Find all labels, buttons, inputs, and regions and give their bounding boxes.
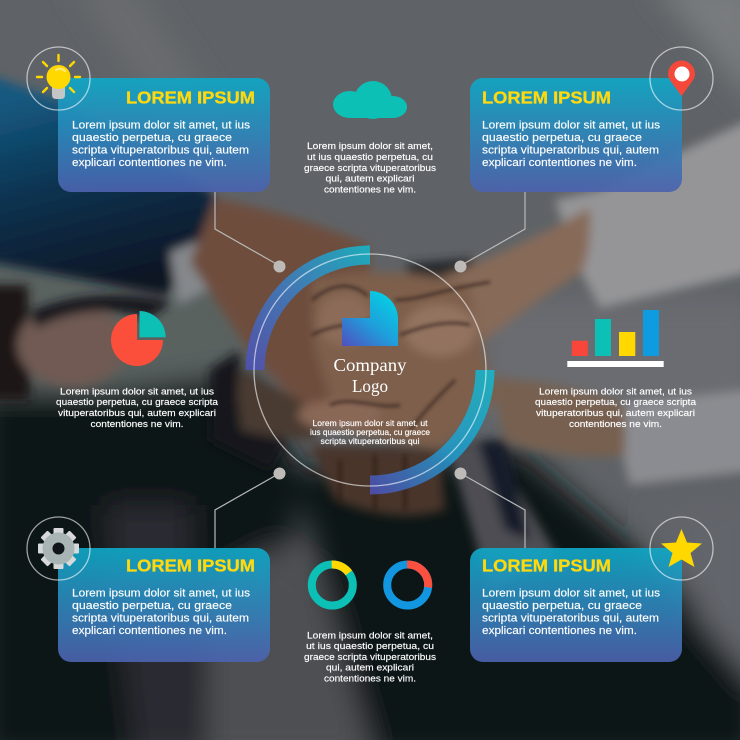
- cloud text: graece scripta vituperatoribus: [304, 162, 436, 173]
- panel: bottom right: [470, 548, 682, 662]
- company logo mark: [342, 291, 398, 346]
- panel text: explicari contentiones ne vim.: [72, 625, 227, 637]
- panel text: [482, 588, 660, 637]
- pie chart text: [56, 386, 219, 429]
- panel text: quaestio perpetua, cu graece: [72, 132, 232, 144]
- pie chart text: Lorem ipsum dolor sit amet, ut ius: [60, 386, 214, 396]
- central text: Lorem ipsum dolor sit amet, ut: [312, 418, 428, 428]
- icon: star: [650, 517, 713, 580]
- heading: LOREM IPSUM: [482, 556, 611, 576]
- company name: Logo: [352, 376, 388, 396]
- panel text: scripta vituperatoribus qui, autem: [482, 144, 659, 156]
- central text: ius quaestio perpetua, cu graece: [310, 427, 430, 437]
- panel text: Lorem ipsum dolor sit amet, ut ius: [72, 588, 250, 600]
- donut charts text: graece scripta vituperatoribus: [304, 651, 436, 662]
- central text: [310, 418, 430, 446]
- cloud text: [304, 140, 436, 194]
- pie chart text: contentiones ne vim.: [90, 418, 184, 429]
- donut charts text: contentiones ne vim.: [324, 672, 416, 684]
- icon: pie chart: [111, 311, 166, 366]
- bar chart: [567, 310, 664, 367]
- donut charts text: qui, autem explicari: [326, 662, 414, 672]
- donut: teal and yellow: [312, 564, 353, 606]
- panel text: explicari contentiones ne vim.: [72, 157, 227, 169]
- pie chart text: vituperatoribus qui, autem explicari: [58, 407, 216, 418]
- heading: LOREM IPSUM: [126, 88, 255, 108]
- cloud text: Lorem ipsum dolor sit amet,: [307, 140, 433, 151]
- panel text: [72, 120, 250, 169]
- panel text: quaestio perpetua, cu graece: [482, 132, 642, 144]
- panel: bottom left: [58, 548, 270, 662]
- pie chart text: quaestio perpetua, cu graece scripta: [56, 396, 219, 407]
- panel text: quaestio perpetua, cu graece: [72, 600, 232, 612]
- company name: [334, 355, 406, 396]
- panel text: [482, 120, 660, 169]
- donut charts: [312, 564, 428, 606]
- panel text: explicari contentiones ne vim.: [482, 625, 637, 637]
- donut charts text: [304, 630, 436, 684]
- panel text: scripta vituperatoribus qui, autem: [72, 144, 249, 156]
- panel text: Lorem ipsum dolor sit amet, ut ius: [72, 120, 250, 132]
- donut charts text: ut ius quaestio perpetua, cu: [306, 640, 434, 651]
- icon: light bulb: [27, 47, 90, 110]
- panel: top right: [470, 78, 682, 192]
- icon: map pin: [650, 47, 713, 110]
- panel text: explicari contentiones ne vim.: [482, 157, 637, 169]
- central text: scripta vituperatoribus qui: [320, 436, 420, 446]
- central ring with arcs: [246, 246, 494, 494]
- cloud text: qui, autem explicari: [326, 172, 414, 184]
- donut charts text: Lorem ipsum dolor sit amet,: [307, 630, 433, 640]
- company name: Company: [334, 355, 406, 375]
- panel text: Lorem ipsum dolor sit amet, ut ius: [482, 588, 660, 600]
- icon: cloud: [333, 81, 407, 119]
- bar chart text: [535, 386, 697, 429]
- heading: LOREM IPSUM: [126, 556, 255, 576]
- bar chart text: vituperatoribus qui, autem explicari: [536, 407, 695, 418]
- icon: gear: [27, 517, 90, 580]
- bar chart text: Lorem ipsum dolor sit amet, ut ius: [539, 386, 692, 396]
- panel text: quaestio perpetua, cu graece: [482, 600, 642, 612]
- panel: top left: [58, 78, 270, 192]
- panel text: scripta vituperatoribus qui, autem: [72, 612, 249, 624]
- cloud text: ut ius quaestio perpetua, cu: [307, 151, 433, 162]
- connector lines and nodes: [215, 192, 525, 548]
- panel text: Lorem ipsum dolor sit amet, ut ius: [482, 120, 660, 132]
- donut: blue and red: [387, 564, 428, 606]
- panel text: scripta vituperatoribus qui, autem: [482, 612, 659, 624]
- bar chart text: contentiones ne vim.: [569, 418, 662, 429]
- panel text: [72, 588, 250, 637]
- cloud text: contentiones ne vim.: [324, 184, 416, 194]
- bar chart text: quaestio perpetua, cu graece scripta: [535, 396, 697, 407]
- heading: LOREM IPSUM: [482, 88, 611, 108]
